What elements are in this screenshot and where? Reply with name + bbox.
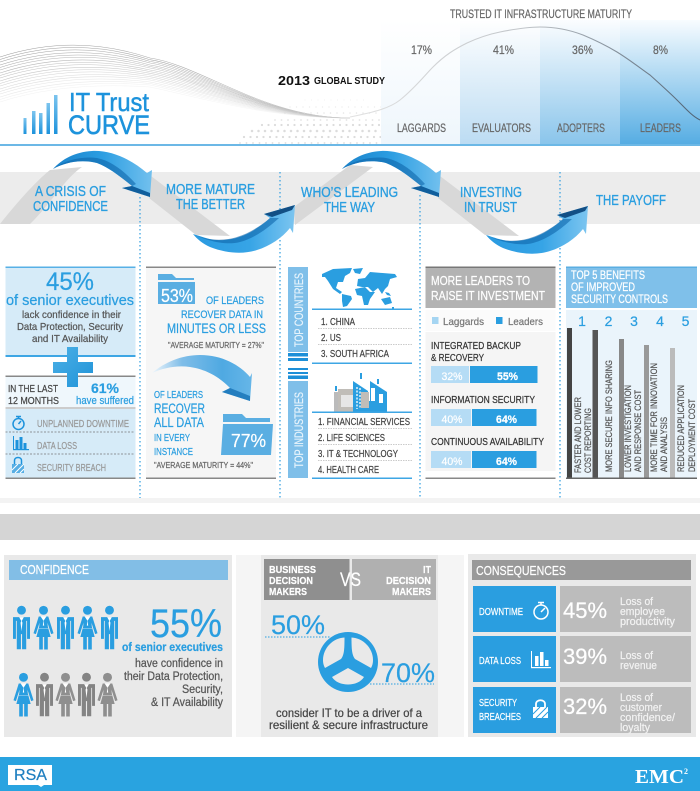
confidence text: Security, (182, 684, 223, 696)
row: security breaches: BREACHES (479, 712, 521, 723)
integrated backup bars: & RECOVERY (431, 352, 484, 364)
confidence description (17, 309, 124, 345)
50 percent stat: 50% (271, 610, 325, 640)
logo bars icon (24, 95, 58, 134)
section headings: WHO’S LEADING (301, 184, 398, 201)
row: security breaches (473, 687, 691, 734)
EMC logo: 2 (684, 767, 688, 776)
information security bars: 64% (496, 414, 517, 426)
panel: who's leading the way (288, 267, 413, 479)
it decision makers: IT (423, 564, 431, 576)
top countries list: 2. US (321, 333, 341, 344)
confidence text: have confidence in (135, 658, 223, 670)
benefits heading: SECURITY CONTROLS (571, 294, 668, 306)
45 percent stat: 45% (46, 268, 94, 296)
benefits heading (571, 270, 668, 306)
recover in minutes text: OF LEADERS (206, 295, 264, 307)
row: downtime: Loss of (620, 596, 654, 608)
panel: crisis of confidence (6, 266, 136, 479)
it decision makers (352, 559, 436, 600)
top countries list: 3. SOUTH AFRICA (321, 349, 389, 360)
panel: investing in trust (426, 266, 556, 479)
investment heading: RAISE IT INVESTMENT (431, 288, 545, 303)
top industries list: 4. HEALTH CARE (318, 465, 379, 476)
top countries tab: TOP COUNTRIES (292, 273, 306, 347)
row: downtime: employee (620, 606, 665, 618)
last 12 months label: 12 MONTHS (8, 395, 59, 407)
people row 2 (13, 673, 118, 716)
breach labels: SECURITY BREACH (37, 463, 106, 474)
row: data loss: revenue (620, 660, 657, 672)
row: security breaches: loyalty (620, 722, 650, 734)
benefit labels: MORE TIME FOR INNOVATION (649, 363, 660, 472)
panel: decision makers (236, 555, 464, 737)
investment heading (431, 273, 545, 303)
title: CURVE (68, 110, 150, 140)
top countries list (321, 317, 389, 360)
breach labels: UNPLANNED DOWNTIME (37, 419, 129, 430)
benefit labels: MORE SECURE INFO SHARING (604, 360, 615, 472)
70 percent stat: 70% (381, 658, 435, 688)
section band (0, 172, 700, 224)
row: downtime: productivity (620, 616, 675, 628)
average maturity 44: "AVERAGE MATURITY = 44%" (154, 461, 253, 470)
panel: consequences (468, 554, 696, 737)
last 12 months label: IN THE LAST (8, 383, 58, 395)
top countries tab (288, 267, 308, 352)
business decision makers: MAKERS (269, 586, 307, 598)
top industries list: 1. FINANCIAL SERVICES (318, 417, 410, 428)
continuous availability bars: 64% (496, 456, 517, 468)
benefit numbers: 5 (682, 313, 690, 329)
section dividers (140, 172, 560, 498)
section headings: THE WAY (324, 199, 375, 216)
benefit labels: FASTER AND LOWER (573, 397, 584, 473)
arrow: section 2 (193, 205, 295, 253)
61 percent stat: 61% (91, 380, 120, 396)
61 percent stat (76, 380, 134, 407)
benefit labels: AND RESPONSE COST (633, 390, 644, 472)
maturity percentages: 17% (411, 43, 432, 57)
row: downtime: DOWNTIME (479, 607, 523, 618)
breach labels (37, 419, 129, 474)
continuous availability bars (431, 436, 544, 468)
consequences header: CONSEQUENCES (476, 563, 566, 578)
halftone dots (240, 100, 440, 143)
information security bars: INFORMATION SECURITY (431, 394, 535, 406)
global study label: GLOBAL STUDY (314, 75, 385, 87)
maturity curve (350, 27, 700, 120)
icon: factories (334, 373, 387, 412)
driver caption: consider IT to be a driver of a (276, 706, 422, 720)
benefits heading: TOP 5 BENEFITS (571, 270, 645, 282)
row: security breaches: SECURITY (479, 698, 517, 709)
world map (322, 268, 397, 309)
top countries list: 1. CHINA (321, 317, 355, 328)
maturity categories: LEADERS (640, 121, 681, 135)
icon: folder 53 percent: 53% (161, 286, 193, 306)
panel: more mature the better (146, 266, 276, 479)
information security bars: 40% (442, 414, 463, 426)
icon: steering wheel (318, 632, 378, 692)
maturity categories: ADOPTERS (557, 121, 605, 135)
senior executives label: of senior executives (122, 640, 223, 654)
senior executives heading: of senior executives (6, 292, 134, 309)
icon: stopwatch (13, 416, 24, 430)
maturity columns (381, 20, 700, 144)
section headings: CONFIDENCE (33, 198, 108, 215)
maturity percentages: 41% (493, 43, 514, 57)
maturity title: TRUSTED IT INFRASTRUCTURE MATURITY (450, 7, 632, 21)
confidence header (9, 560, 228, 580)
footer (0, 757, 700, 791)
row: security breaches: confidence/ (620, 712, 676, 724)
benefit numbers: 4 (656, 313, 664, 329)
lower band (0, 514, 700, 540)
arrow: section 1 (53, 151, 152, 197)
confidence text (124, 658, 223, 709)
row: security breaches: 32% (563, 694, 607, 719)
section headings: A CRISIS OF (35, 183, 106, 200)
icon: folder 77 percent (221, 414, 273, 455)
recover all data text: IN EVERY (154, 432, 190, 444)
benefit labels: AND ANALYSIS (659, 417, 670, 472)
confidence description: Data Protection, Security (17, 321, 124, 333)
recover all data text (154, 389, 205, 458)
benefits heading: OF IMPROVED (571, 282, 635, 294)
row: data loss: 39% (563, 644, 607, 669)
versus label: VS (340, 570, 361, 591)
icon: folder 77 percent: 77% (231, 431, 266, 451)
benefit numbers: 1 (578, 313, 586, 329)
benefit labels (573, 360, 698, 473)
section headings: THE BETTER (176, 196, 245, 213)
RSA logo: RSA (14, 767, 47, 784)
confidence text: & IT Availability (151, 697, 223, 709)
title: IT Trust (69, 87, 150, 117)
icon: lock (12, 458, 24, 473)
integrated backup bars: 32% (442, 371, 463, 383)
section headings: INVESTING (460, 184, 522, 201)
business decision makers: BUSINESS (269, 564, 316, 576)
section headings: IN TRUST (464, 199, 517, 216)
driver caption (269, 706, 428, 732)
row: downtime: 45% (563, 598, 607, 623)
maturity categories: LAGGARDS (397, 121, 446, 135)
maturity chart (350, 7, 700, 144)
row: security breaches: Loss of (620, 692, 654, 704)
section headings: THE PAYOFF (596, 192, 666, 209)
last 12 months label (8, 383, 59, 407)
integrated backup bars: INTEGRATED BACKUP (431, 340, 521, 352)
continuous availability bars: 40% (442, 456, 463, 468)
information security bars (431, 394, 536, 426)
top industries tab (288, 381, 308, 478)
row: downtime (473, 586, 691, 632)
legend: Leaders (508, 316, 543, 328)
RSA logo (8, 765, 52, 787)
section headings: MORE MATURE (166, 181, 255, 198)
continuous availability bars: CONTINUOUS AVAILABILITY (431, 436, 544, 448)
integrated backup bars (431, 340, 538, 383)
business decision makers (264, 559, 350, 600)
benefit numbers (578, 313, 690, 329)
recover all data text: RECOVER (154, 400, 205, 416)
business decision makers: DECISION (269, 575, 313, 587)
recover all data text: OF LEADERS (154, 389, 203, 401)
row: data loss: Loss of (620, 650, 654, 662)
maturity percentages: 36% (572, 43, 593, 57)
benefit labels: COST REPORTING (583, 408, 594, 473)
benefit labels: DEPLOYMENT COST (687, 399, 698, 472)
icon: folder 53 percent (158, 274, 195, 306)
breach labels: DATA LOSS (37, 441, 77, 452)
row: security breaches: customer (620, 702, 662, 714)
global study label: 2013 (278, 74, 310, 88)
61 percent stat: have suffered (76, 395, 134, 407)
maturity percentages: 8% (653, 43, 668, 57)
row: data loss (473, 636, 691, 682)
arrow: section 4 (486, 206, 588, 254)
recover all data text: ALL DATA (154, 414, 205, 430)
integrated backup bars: 55% (497, 371, 518, 383)
plus sign (53, 347, 93, 387)
legend: Laggards (443, 316, 484, 328)
confidence header: CONFIDENCE (20, 562, 89, 577)
benefit numbers: 3 (630, 313, 638, 329)
top industries list (318, 417, 410, 476)
driver caption: resilient & secure infrastructure (269, 718, 428, 732)
55 percent stat: 55% (150, 602, 222, 646)
recover in minutes text: MINUTES OR LESS (167, 320, 266, 336)
global study label (278, 74, 385, 88)
panel: confidence (4, 555, 232, 737)
confidence description: and IT Availability (32, 333, 109, 345)
top industries list: 2. LIFE SCIENCES (318, 433, 385, 444)
confidence text: their Data Protection, (124, 671, 223, 683)
EMC logo: EMC (635, 766, 684, 788)
gray ribbon (0, 165, 519, 236)
people row 1 (13, 606, 118, 649)
average maturity 27: "AVERAGE MATURITY = 27%" (168, 341, 264, 350)
legend (432, 316, 543, 328)
recover all data text: INSTANCE (154, 446, 193, 458)
maturity percentages (411, 43, 668, 57)
top industries list: 3. IT & TECHNOLOGY (318, 449, 398, 460)
maturity categories (397, 121, 681, 135)
row: data loss: DATA LOSS (479, 656, 521, 667)
recover in minutes text (167, 295, 266, 336)
benefit labels: REDUCED APPLICATION (676, 385, 687, 472)
section headings (33, 181, 666, 216)
header wave line bundle (0, 45, 350, 118)
arrow: section 3 (342, 151, 441, 197)
arrow: down to 77 percent (152, 355, 252, 401)
benefit numbers: 2 (605, 313, 613, 329)
recover in minutes text: RECOVER DATA IN (181, 309, 263, 321)
confidence description: lack confidence in their (22, 309, 121, 321)
maturity categories: EVALUATORS (472, 121, 531, 135)
investment heading: MORE LEADERS TO (431, 273, 530, 288)
title (68, 87, 150, 140)
it decision makers: DECISION (386, 575, 431, 587)
benefit labels: LOWER INVESTIGATION (623, 385, 634, 472)
benefit bars (567, 328, 675, 478)
it decision makers: MAKERS (392, 586, 431, 598)
panel: the payoff (566, 266, 698, 479)
icon: data loss bars (13, 436, 29, 450)
top industries tab: TOP INDUSTRIES (292, 392, 306, 468)
consequences header (472, 560, 691, 580)
